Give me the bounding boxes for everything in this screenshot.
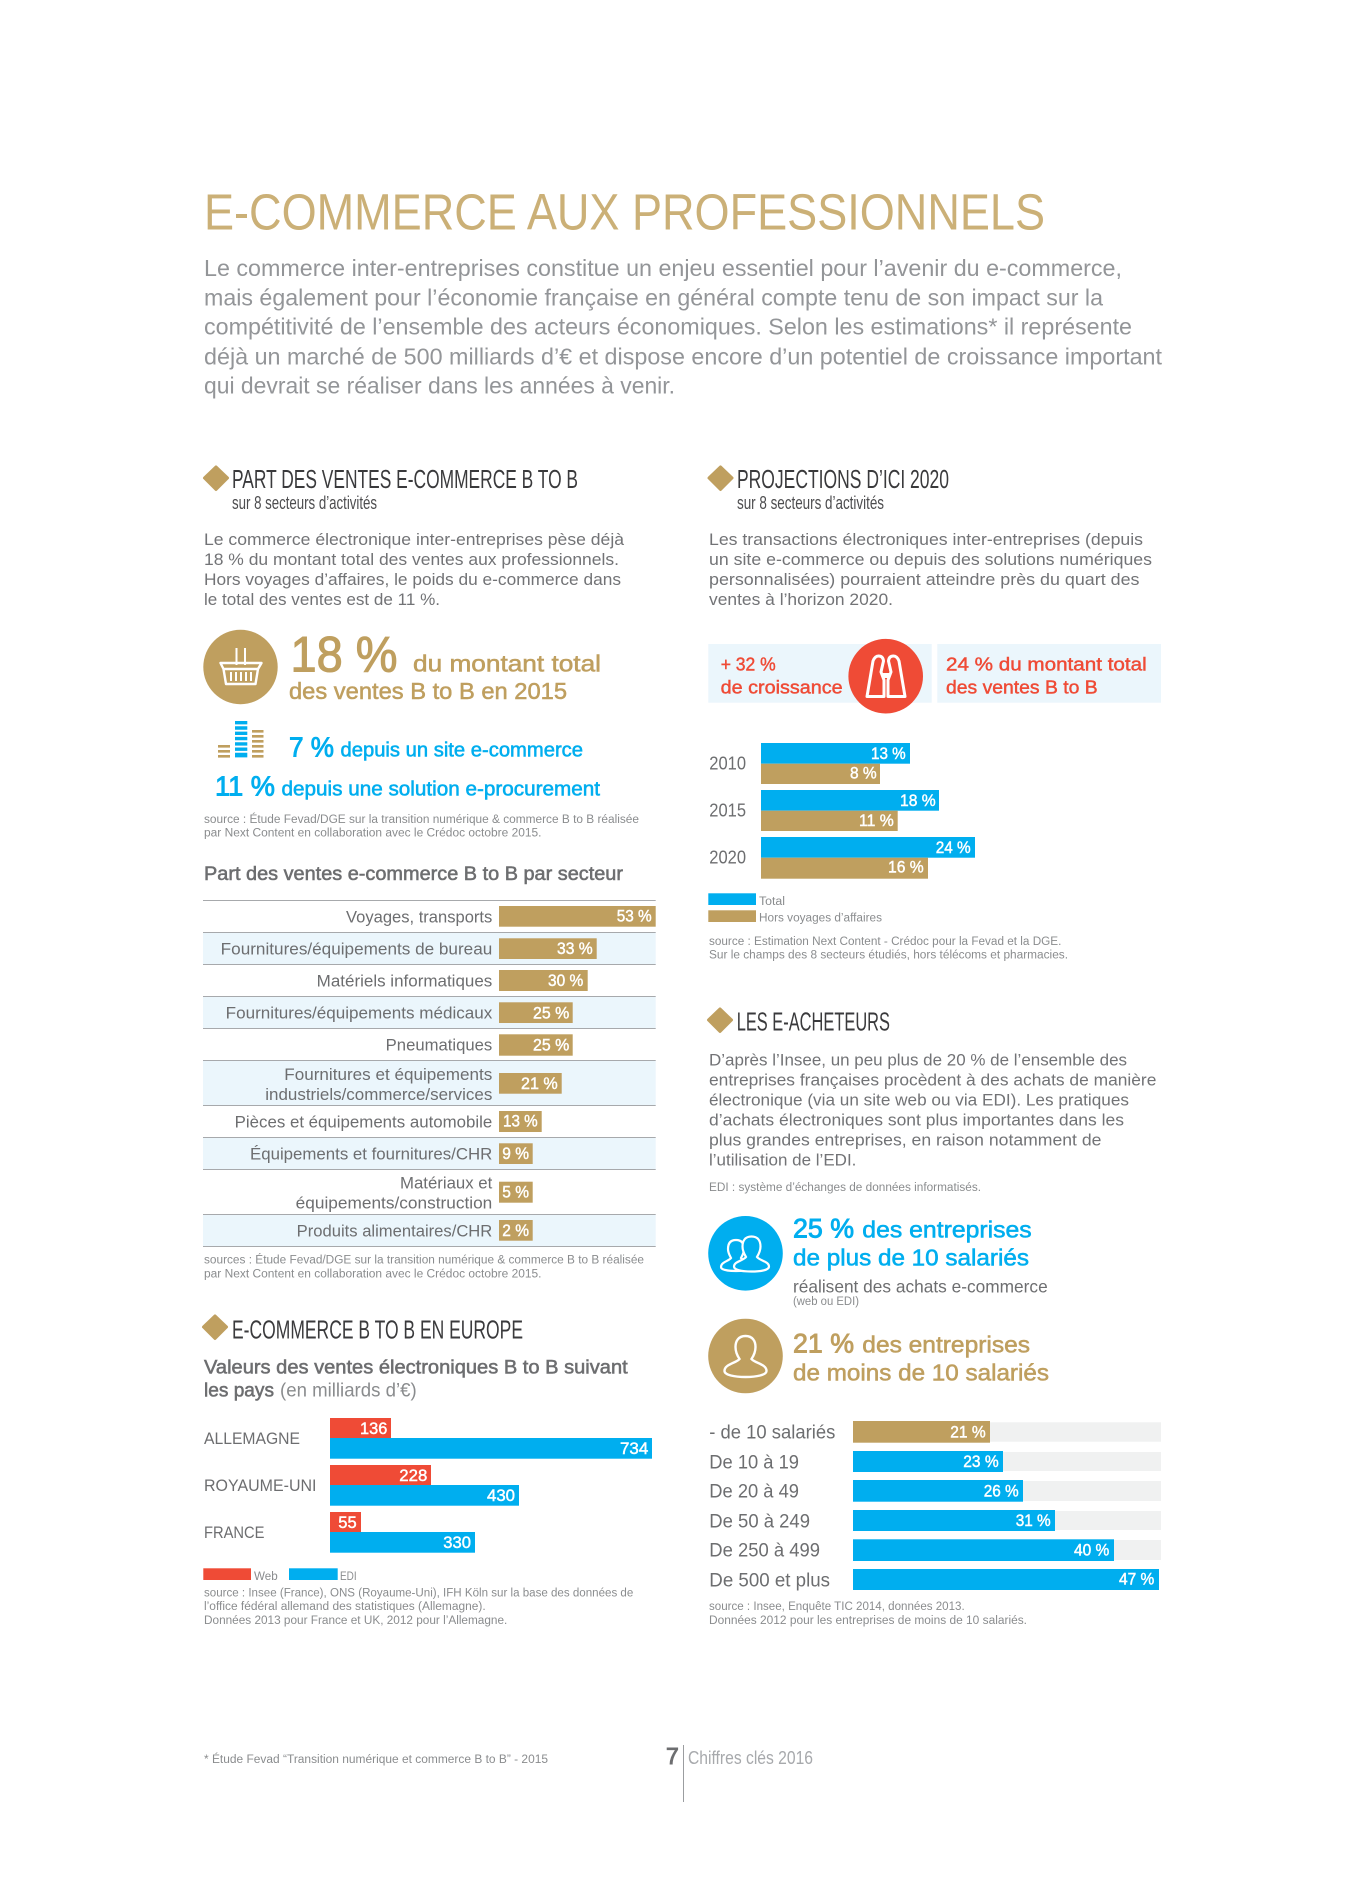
footnote: EDI definition: EDI : système d’échanges de données informatisés. (709, 1182, 981, 1194)
source note: source : Étude Fevad/DGE sur la transition numérique & commerce B to B réalisée (204, 813, 639, 826)
bar chart: countries: 55 (338, 1514, 357, 1532)
body text: plus grandes entreprises, en raison notamment de (709, 1132, 1101, 1150)
key figure: 18 %: des ventes B to B en 2015 (289, 678, 567, 704)
source note: source : Insee, Enquête TIC 2014, données 2013. (709, 1601, 965, 1613)
key figure: 18 %: du montant total (413, 650, 601, 676)
key figure: 18 % (289, 626, 601, 704)
bar chart: sectors: 13 % (503, 1113, 538, 1131)
callout: growth (708, 644, 932, 703)
bar chart: company size: 31 % (1016, 1512, 1051, 1530)
footer publication name: Chiffres clés 2016 (688, 1747, 813, 1768)
body text: un site e-commerce ou depuis des solutions numériques (709, 551, 1152, 569)
bar chart: sectors: industriels/commerce/services (265, 1086, 492, 1104)
body text: Le commerce électronique inter-entreprises pèse déjà (204, 531, 625, 549)
panel: les e-acheteurs (708, 1007, 1161, 1627)
chart heading: Part des ventes e-commerce B to B par secteur (204, 863, 624, 885)
bar chart: projections: 24 % (936, 839, 971, 857)
callout: share (937, 644, 1161, 703)
source note (709, 1601, 1027, 1627)
callout: growth: de croissance (721, 676, 843, 697)
bar chart: sectors: 5 % (502, 1183, 529, 1201)
bar chart: company size: - de 10 salariés (709, 1422, 835, 1443)
legend (708, 893, 882, 925)
legend: Hors voyages d’affaires (759, 913, 882, 925)
key figure: 21 %: des entreprises (862, 1332, 1030, 1358)
table row stripes (203, 932, 656, 1246)
chart heading: (en milliards d’€) (280, 1380, 417, 1402)
body text: l’utilisation de l’EDI. (709, 1152, 856, 1170)
bar chart: sectors: Voyages, transports (346, 908, 492, 926)
bar chart: sectors: 25 % (533, 1004, 570, 1022)
bar chart: company size: De 250 à 499 (709, 1541, 820, 1562)
bar chart: countries: ROYAUME-UNI (204, 1477, 316, 1495)
bar chart: sectors: Pièces et équipements automobile (235, 1114, 492, 1132)
bar chart: sectors: Fournitures et équipements (284, 1066, 492, 1084)
bar chart: sectors: 33 % (557, 940, 593, 958)
icon: stacked bars (218, 721, 264, 758)
icon: section diamond (204, 467, 228, 490)
bar chart: sectors: 21 % (521, 1075, 558, 1093)
chart heading: Valeurs des ventes électroniques B to B suivant (204, 1356, 628, 1378)
bar chart: company size: De 10 à 19 (709, 1452, 799, 1473)
legend (203, 1568, 357, 1583)
icon: section diamond (708, 1009, 732, 1032)
legend: EDI (340, 1571, 357, 1583)
panel: projections d'ici 2020 (708, 464, 1161, 961)
section subheading: sur 8 secteurs d’activités (232, 493, 377, 513)
bar chart: sectors: Produits alimentaires/CHR (297, 1223, 492, 1241)
panel: part des ventes B to B (203, 464, 639, 840)
intro text block: mais également pour l’économie française en général compte tenu de son impact sur la (204, 284, 1104, 310)
key figure: 21 %: de moins de 10 salariés (793, 1360, 1049, 1386)
key figures: 7 % and 11 %: 11 % (215, 770, 275, 802)
legend: Web (254, 1571, 278, 1583)
bar chart: projections (709, 743, 975, 879)
body text: personnalisées) pourraient atteindre près du quart des (709, 571, 1140, 589)
legend: Total (759, 896, 785, 908)
key figure: 25 %: de plus de 10 salariés (793, 1245, 1029, 1271)
key figures: 7 % and 11 %: depuis un site e-commerce (340, 740, 583, 762)
source note: par Next Content en collaboration avec le Crédoc octobre 2015. (204, 1268, 542, 1280)
bar chart: countries: FRANCE (204, 1524, 264, 1542)
body text (709, 1052, 1156, 1170)
body text: 18 % du montant total des ventes aux professionnels. (204, 551, 619, 569)
section heading: LES E-ACHETEURS (737, 1007, 890, 1037)
bar chart: sectors: 9 % (502, 1145, 529, 1163)
bar chart: sectors: Équipements et fournitures/CHR (250, 1144, 492, 1163)
bar chart: sectors: 25 % (533, 1037, 570, 1055)
bar chart: projections: 2015 (709, 800, 746, 820)
icon: single user (708, 1319, 783, 1393)
key figures: 7 % and 11 %: depuis une solution e-procurement (282, 778, 600, 800)
bar chart: company size: 47 % (1119, 1571, 1155, 1589)
bar chart: countries: 136 (360, 1420, 387, 1438)
bar chart: sectors: 53 % (617, 908, 652, 926)
bar chart: sectors: 30 % (548, 972, 584, 990)
bar chart: company size: De 20 à 49 (709, 1482, 799, 1503)
bar chart: sectors (221, 906, 656, 1241)
section heading: E-COMMERCE B TO B EN EUROPE (232, 1314, 523, 1344)
section heading: PROJECTIONS D’ICI 2020 (737, 464, 949, 494)
bar chart: projections: 18 % (900, 792, 936, 810)
intro text block: Le commerce inter-entreprises constitue un enjeu essentiel pour l’avenir du e-commerce, (204, 255, 1122, 281)
source note (709, 936, 1068, 961)
source note (204, 1588, 633, 1627)
intro text block (204, 255, 1162, 398)
body text: ventes à l’horizon 2020. (709, 591, 893, 609)
bar chart: company size: 26 % (984, 1483, 1019, 1501)
bar chart: sectors: Pneumatiques (386, 1036, 492, 1054)
source note: par Next Content en collaboration avec le Crédoc octobre 2015. (204, 828, 542, 840)
chart heading (204, 1356, 628, 1402)
body text: d’achats électroniques sont plus importantes dans les (709, 1112, 1124, 1130)
panel: part des ventes par secteur (203, 863, 656, 1280)
source note (204, 813, 639, 840)
panel: e-commerce B to B en Europe (203, 1314, 652, 1627)
bar chart: countries: 228 (399, 1467, 427, 1485)
bar chart: countries (204, 1418, 652, 1553)
callout: growth: + 32 % (721, 654, 776, 675)
key figure: 18 %: 18 % (290, 626, 398, 682)
section subheading: sur 8 secteurs d’activités (737, 493, 884, 513)
bar chart: company size (709, 1421, 1161, 1592)
body text: électronique (via un site web ou via EDI). Les pratiques (709, 1092, 1129, 1110)
key figure: 21 %: 21 % (793, 1329, 854, 1359)
icon: basket (203, 630, 278, 704)
body text: le total des ventes est de 11 %. (204, 591, 440, 609)
key figure: 25 %: réalisent des achats e-commerce (793, 1276, 1048, 1296)
body text: Hors voyages d’affaires, le poids du e-commerce dans (204, 571, 621, 589)
intro text block: déjà un marché de 500 milliards d’€ et dispose encore d’un potentiel de croissance important (204, 344, 1162, 370)
bar chart: projections: 11 % (859, 812, 894, 830)
bar chart: projections: 16 % (888, 859, 924, 877)
bar chart: countries: ALLEMAGNE (204, 1430, 300, 1448)
key figures: 7 % and 11 %: 7 % (289, 732, 334, 762)
source note: Données 2012 pour les entreprises de moins de 10 salariés. (709, 1615, 1027, 1627)
key figure: 25 %: des entreprises (862, 1216, 1032, 1242)
icon: section diamond (204, 1316, 226, 1338)
source note: l’office fédéral allemand des statistiques (Allemagne). (204, 1601, 486, 1613)
bar chart: projections: 13 % (871, 745, 906, 763)
bar chart: countries: 330 (443, 1534, 471, 1552)
bar chart: projections: 2020 (709, 848, 746, 868)
source note: sources : Étude Fevad/DGE sur la transition numérique & commerce B to B réalisée (204, 1253, 644, 1266)
bar chart: sectors: équipements/construction (296, 1194, 492, 1212)
bar chart: company size: De 50 à 249 (709, 1512, 810, 1533)
key figure: 21 % (793, 1329, 1049, 1386)
chart heading: les pays (204, 1380, 274, 1402)
body text: entreprises françaises procèdent à des achats de manière (709, 1072, 1156, 1090)
body text: Les transactions électroniques inter-entreprises (depuis (709, 531, 1143, 549)
source note: Données 2013 pour France et UK, 2012 pour l’Allemagne. (204, 1615, 507, 1627)
bar chart: sectors: Fournitures/équipements de bureau (221, 940, 492, 958)
body text (709, 531, 1152, 609)
bar chart: company size: 23 % (963, 1453, 999, 1471)
bar chart: company size: De 500 et plus (709, 1571, 830, 1592)
bar chart: countries: 734 (620, 1440, 648, 1458)
key figure: 25 %: (web ou EDI) (793, 1296, 859, 1308)
icon: section diamond (709, 467, 732, 490)
bar chart: company size: 21 % (950, 1424, 986, 1442)
footer footnote: * Étude Fevad “Transition numérique et commerce B to B” - 2015 (204, 1753, 548, 1766)
key figure: 25 %: 25 % (793, 1213, 854, 1243)
bar chart: sectors: 2 % (502, 1222, 529, 1240)
icon: binoculars (848, 639, 923, 714)
page number: 7 (666, 1743, 679, 1769)
source note: Sur le champs des 8 secteurs étudiés, hors télécoms et pharmacies. (709, 949, 1068, 961)
intro text block: qui devrait se réaliser dans les années à venir. (204, 372, 675, 398)
bar chart: projections: 8 % (850, 765, 877, 783)
callout: share: des ventes B to B (946, 676, 1098, 697)
intro text block: compétitivité de l’ensemble des acteurs économiques. Selon les estimations* il représente (204, 314, 1132, 340)
bar chart: projections: 2010 (709, 754, 746, 774)
title: E-COMMERCE AUX PROFESSIONNELS (204, 184, 1045, 240)
callout: share: 24 % du montant total (946, 654, 1147, 675)
bar chart: sectors: Matériaux et (400, 1174, 493, 1192)
source note (204, 1253, 644, 1280)
body text: D’après l’Insee, un peu plus de 20 % de l’ensemble des (709, 1052, 1127, 1070)
key figures: 7 % and 11 % (215, 732, 600, 802)
bar chart: company size: 40 % (1074, 1541, 1110, 1559)
bar chart: sectors: Matériels informatiques (317, 972, 492, 990)
bar chart: sectors: Fournitures/équipements médicaux (226, 1004, 493, 1022)
key figure: 25 % (793, 1213, 1048, 1308)
icon: two users (708, 1216, 783, 1291)
source note: source : Insee (France), ONS (Royaume-Uni), IFH Köln sur la base des données de (204, 1588, 633, 1600)
bar chart: countries: 430 (487, 1487, 515, 1505)
body text (204, 531, 625, 609)
section heading: PART DES VENTES E-COMMERCE B TO B (232, 464, 578, 494)
source note: source : Estimation Next Content - Crédoc pour la Fevad et la DGE. (709, 936, 1061, 948)
